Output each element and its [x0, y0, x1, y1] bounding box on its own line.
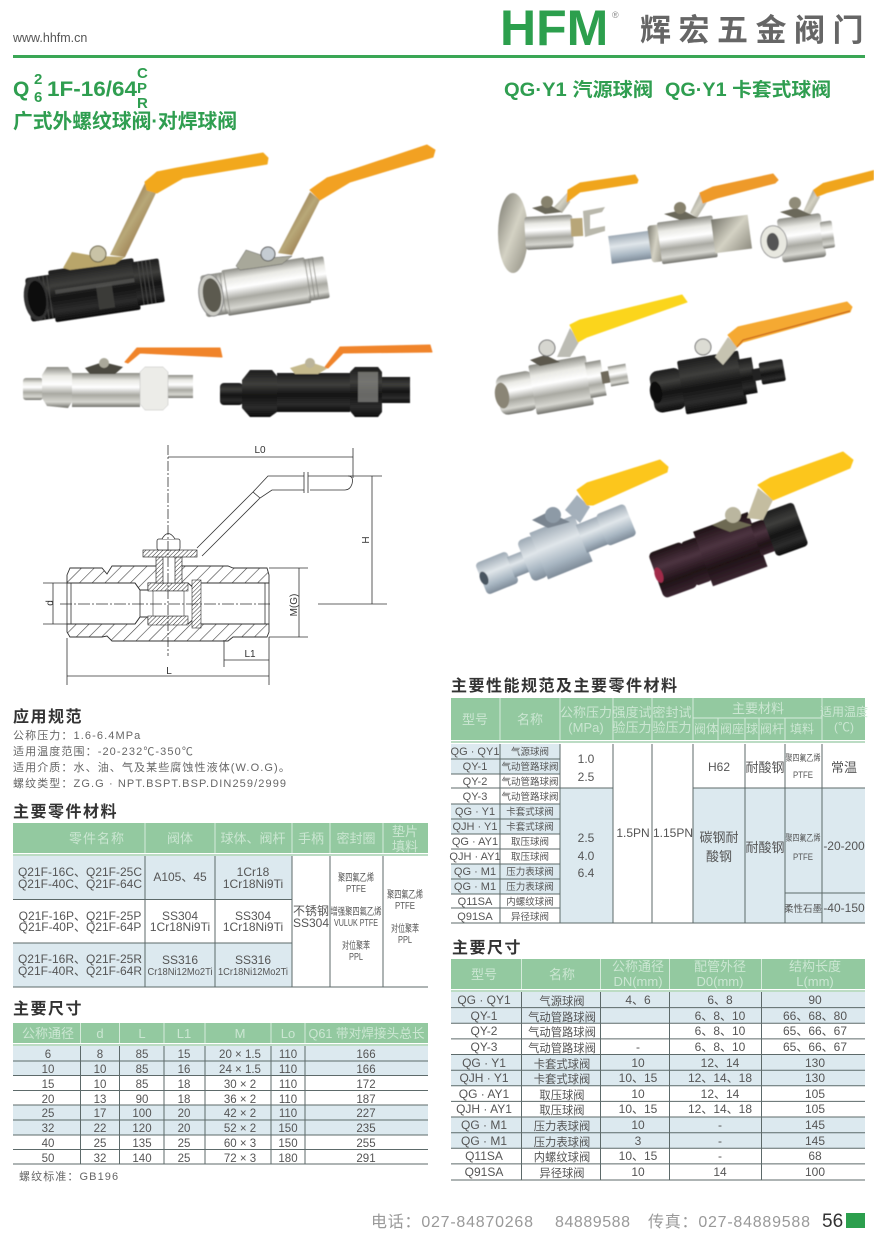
table header: 阀座 — [720, 721, 744, 736]
model and name rows: 气源球阀 — [511, 746, 549, 758]
table rows: 6、8 — [707, 993, 733, 1007]
title: left product model: 1F-16/64 — [47, 78, 137, 101]
table rows: 72 × 3 — [224, 1153, 256, 1165]
table rows: 25 — [94, 1138, 106, 1150]
table rows: 压力表球阀 — [534, 1135, 590, 1149]
center lines and dimensions — [43, 445, 387, 685]
table rows: 42 × 2 — [224, 1108, 256, 1120]
dimension labels: L — [166, 666, 172, 677]
table header — [462, 701, 868, 736]
table header: 公称通径 — [612, 959, 664, 974]
section heading: main parts materials: 主要零件材料 — [13, 802, 118, 821]
title: left product model: Q — [13, 78, 29, 101]
technical cross-section drawing — [43, 445, 387, 685]
brand logo — [500, 0, 871, 56]
merged spec cells: 2.5 — [578, 831, 595, 845]
table header: 球体、阀杆 — [220, 831, 286, 846]
table header: 名称 — [517, 712, 543, 727]
merged spec cells — [578, 752, 865, 915]
dimension labels: M(G) — [289, 594, 300, 616]
table rows: 15 — [42, 1079, 54, 1091]
table rows: 166 — [356, 1064, 376, 1076]
footer contact line: 84889588 — [555, 1214, 630, 1231]
table header — [22, 1026, 424, 1041]
table rows: 12、14、18 — [688, 1102, 752, 1116]
merged spec cells: 常温 — [831, 760, 857, 775]
table rows: 90 — [808, 993, 822, 1007]
table header: 型号 — [471, 967, 497, 982]
table rows: 气动管路球阀 — [528, 1025, 596, 1039]
table body: Cr18Ni12Mo2Ti — [148, 967, 212, 978]
table rows: Q91SA — [465, 1165, 503, 1179]
table body: SS316 — [235, 953, 271, 967]
dimension labels: L0 — [254, 445, 266, 456]
table rows: 100 — [805, 1165, 825, 1179]
merged spec cells: 2.5 — [578, 770, 595, 784]
section: application specs: 螺纹类型：ZG.G · NPT.BSPT.BSP.DIN259/2999 — [13, 776, 287, 790]
model and name rows: 气动管路球阀 — [501, 791, 559, 803]
table rows: 10 — [94, 1064, 106, 1076]
table rows: QY-1 — [471, 1009, 498, 1023]
table body: Q21F-40P、Q21F-64P — [19, 920, 141, 934]
title: left product model — [13, 65, 237, 133]
table body: Q21F-16R、Q21F-25R — [18, 952, 142, 966]
table body: SS304 — [293, 916, 329, 930]
table rows: 68 — [808, 1149, 822, 1163]
table rows: 172 — [356, 1079, 376, 1091]
table body: Q21F-40R、Q21F-64R — [18, 964, 142, 978]
table header: 阀体 — [694, 722, 718, 736]
table rows: 6 — [45, 1049, 51, 1061]
model and name rows: 内螺纹球阀 — [506, 896, 554, 908]
table rows: 50 — [42, 1153, 54, 1165]
model and name rows: 取压球阀 — [511, 836, 549, 848]
table body: Q21F-40C、Q21F-64C — [18, 877, 142, 891]
table rows: 3 — [635, 1134, 642, 1148]
table rows: 18 — [178, 1094, 190, 1106]
table rows: 12、14 — [701, 1056, 740, 1070]
table rows: 25 — [178, 1138, 190, 1150]
table rows: 20 × 1.5 — [219, 1049, 261, 1061]
table rows: 110 — [279, 1079, 297, 1091]
table header: 填料 — [790, 722, 814, 736]
table rows: - — [718, 1118, 722, 1132]
table rows: 20 — [178, 1108, 190, 1120]
table rows: QG · M1 — [461, 1118, 507, 1132]
model and name rows: QG · AY1 — [452, 836, 498, 848]
website url: www.hhfm.cn — [12, 31, 87, 45]
table rows: 10 — [42, 1064, 54, 1076]
merged spec cells: 聚四氟乙烯 — [786, 832, 820, 843]
model and name rows: 气动管路球阀 — [501, 761, 559, 773]
photo: hex-end ball valve — [607, 174, 778, 271]
table header: 密封试 — [652, 705, 692, 720]
table header: 公称通径 — [22, 1026, 74, 1041]
table body: SS304 — [235, 909, 271, 923]
model and name rows: QY-2 — [463, 776, 487, 788]
table rows: 卡套式球阀 — [534, 1072, 590, 1086]
table rows: - — [718, 1149, 722, 1163]
model and name rows: 取压球阀 — [511, 851, 549, 863]
title: left product model: P — [137, 80, 147, 97]
photo: dark compression valve — [645, 452, 853, 604]
table rows: 压力表球阀 — [534, 1119, 590, 1133]
table body: 1Cr18 — [237, 865, 270, 879]
table rows: 65、66、67 — [783, 1024, 847, 1038]
title: left product model: 2 — [34, 71, 42, 88]
table header: 验压力 — [612, 720, 652, 735]
table rows: QG · Y1 — [462, 1056, 506, 1070]
table header: 型号 — [462, 712, 488, 727]
table header: D0(mm) — [697, 974, 743, 989]
table rows: 8 — [97, 1049, 103, 1061]
table rows: 32 — [42, 1123, 54, 1135]
table header: L — [138, 1026, 146, 1041]
model and name rows: QG · QY1 — [451, 746, 499, 758]
merged spec cells: PTFE — [793, 770, 813, 780]
table rows: 187 — [356, 1094, 376, 1106]
table header: 公称压力 — [560, 705, 612, 720]
merged spec cells: 1.15PN — [653, 826, 693, 840]
table rows: 66、68、80 — [783, 1009, 847, 1023]
table header: Q61 带对焊接头总长 — [308, 1026, 424, 1041]
table rows: 10 — [631, 1118, 645, 1132]
table body: PPL — [349, 952, 363, 963]
model and name rows: QG · Y1 — [455, 806, 495, 818]
page number with green square — [822, 1211, 865, 1232]
model and name rows: 异径球阀 — [511, 911, 549, 923]
table rows: 227 — [356, 1108, 376, 1120]
table rows: 180 — [278, 1153, 298, 1165]
merged spec cells: H62 — [708, 760, 730, 774]
table rows: - — [636, 1040, 640, 1054]
model and name rows: QY-1 — [463, 761, 487, 773]
merged spec cells: 碳钢耐 — [699, 830, 739, 845]
table header: L1 — [177, 1026, 191, 1041]
table header: 阀体 — [167, 831, 193, 846]
table header: 阀杆 — [760, 722, 784, 736]
table body: 1Cr18Ni9Ti — [150, 920, 210, 934]
table header: 手柄 — [298, 831, 324, 846]
table rows: QY-3 — [471, 1040, 498, 1054]
title: right product names — [504, 79, 831, 101]
model and name rows: 压力表球阀 — [506, 866, 554, 878]
table rows: 145 — [805, 1134, 825, 1148]
photo: chrome threaded ball valve — [196, 145, 435, 320]
table rows: 异径球阀 — [539, 1166, 585, 1180]
table rows: 12、14 — [701, 1087, 740, 1101]
table body: SS304 — [162, 909, 198, 923]
table rows: 18 — [178, 1079, 190, 1091]
table rows: 120 — [132, 1123, 152, 1135]
table rows: 10 — [631, 1056, 645, 1070]
table rows: 110 — [279, 1108, 297, 1120]
title: right product names: QG·Y1 卡套式球阀 — [665, 79, 831, 101]
table rows: 10 — [94, 1079, 106, 1091]
table header: (℃) — [834, 720, 854, 734]
table rows: 150 — [278, 1138, 298, 1150]
merged spec cells: 1.0 — [578, 752, 595, 766]
table body: 聚四氟乙烯 — [387, 888, 423, 901]
table rows: QJH · Y1 — [459, 1071, 509, 1085]
section: application specs — [13, 707, 291, 790]
merged spec cells: PTFE — [793, 852, 813, 862]
table rows: 25 — [178, 1153, 190, 1165]
table rows: 140 — [132, 1153, 152, 1165]
table rows: QJH · AY1 — [456, 1102, 512, 1116]
table rows: 10 — [631, 1087, 645, 1101]
table body: A105、45 — [153, 870, 207, 884]
table rows: 取压球阀 — [539, 1103, 585, 1117]
table rows: QG · AY1 — [459, 1087, 510, 1101]
footer contact line: 传真：027-84889588 — [648, 1213, 810, 1231]
section: application specs: 应用规范 — [13, 707, 83, 726]
model and name rows: QG · M1 — [454, 881, 496, 893]
handle — [197, 472, 352, 556]
table rows: 10、15 — [619, 1071, 658, 1085]
table rows: 10 — [631, 1165, 645, 1179]
dimension labels: d — [45, 600, 56, 606]
table header: 验压力 — [652, 720, 692, 735]
table rows: 291 — [356, 1153, 376, 1165]
model and name rows: 卡套式球阀 — [506, 821, 554, 833]
dimension labels: L1 — [244, 649, 256, 660]
table rows: 52 × 2 — [224, 1123, 256, 1135]
table body: PTFE — [395, 901, 415, 912]
table rows: 90 — [136, 1094, 148, 1106]
model and name rows: QJH · AY1 — [449, 851, 501, 863]
table rows: 24 × 1.5 — [219, 1064, 261, 1076]
title: left product model: C — [137, 65, 148, 82]
table rows: 14 — [713, 1165, 727, 1179]
photo: small dark weld valve — [220, 345, 432, 417]
photo: black threaded ball valve — [20, 153, 268, 326]
merged spec cells: 4.0 — [578, 849, 595, 863]
title: right product names: QG·Y1 汽源球阀 — [504, 79, 653, 101]
table body: 聚四氟乙烯 — [338, 871, 374, 884]
table header: Lo — [281, 1026, 295, 1041]
valve body section — [67, 534, 269, 641]
footer contact line: 电话：027-84870268 — [371, 1213, 533, 1231]
table body: VULUK PTFE — [334, 918, 378, 929]
table header: DN(mm) — [613, 974, 663, 989]
photo: compact ball valve — [758, 170, 874, 265]
table rows: 32 — [94, 1153, 106, 1165]
table rows: 12、14、18 — [688, 1071, 752, 1085]
photo: silver compression valve — [471, 460, 668, 603]
table rows: 取压球阀 — [539, 1088, 585, 1102]
table rows: 110 — [279, 1064, 297, 1076]
section: application specs: 适用温度范围：-20-232℃-350℃ — [13, 744, 194, 758]
table header: d — [96, 1026, 104, 1041]
table: main dimensions right — [451, 959, 865, 1180]
photo: small chrome weld valve — [23, 348, 222, 410]
table header: 球 — [746, 722, 758, 736]
table rows: 卡套式球阀 — [534, 1057, 590, 1071]
table rows: 25 — [42, 1108, 54, 1120]
section heading: performance specs: 主要性能规范及主要零件材料 — [451, 676, 679, 695]
table rows: 105 — [805, 1102, 825, 1116]
table rows — [456, 993, 847, 1180]
table rows: 85 — [136, 1064, 148, 1076]
table rows: 15 — [178, 1049, 190, 1061]
title: left product model: R — [137, 95, 148, 112]
table header: 强度试 — [612, 705, 652, 720]
table rows: 100 — [132, 1108, 152, 1120]
merged spec cells: 耐酸钢 — [745, 840, 785, 855]
table body: Q21F-16P、Q21F-25P — [19, 909, 141, 923]
table rows: 10、15 — [619, 1102, 658, 1116]
table rows: 150 — [278, 1123, 298, 1135]
table rows: 130 — [805, 1056, 825, 1070]
merged spec cells: 1.5PN — [616, 826, 650, 840]
table header: 适用温度 — [820, 704, 868, 719]
table rows: 10、15 — [619, 1149, 658, 1163]
table rows: 4、6 — [625, 993, 651, 1007]
table: main parts materials — [13, 823, 428, 987]
table rows: 13 — [94, 1094, 106, 1106]
photo: flanged source ball valve — [498, 175, 638, 273]
title: left product model: 6 — [34, 89, 42, 106]
model and name rows: 气动管路球阀 — [501, 776, 559, 788]
title: left product model: 广式外螺纹球阀·对焊球阀 — [13, 109, 237, 133]
table rows: 气动管路球阀 — [528, 1010, 596, 1024]
table rows: 40 — [42, 1138, 54, 1150]
model and name rows: QY-3 — [463, 791, 487, 803]
merged spec cells: 柔性石墨 — [784, 903, 822, 915]
table rows: Q11SA — [465, 1149, 503, 1163]
footer contact line — [371, 1213, 810, 1231]
brand logo: 辉宏五金阀门 — [640, 13, 871, 48]
table rows: 16 — [178, 1064, 190, 1076]
table header: 主要材料 — [732, 701, 784, 716]
section: application specs: 公称压力：1.6-6.4MPa — [13, 728, 141, 742]
table rows: 105 — [805, 1087, 825, 1101]
table body: 1Cr18Ni12Mo2Ti — [218, 967, 288, 978]
table rows: 60 × 3 — [224, 1138, 256, 1150]
table rows: 235 — [356, 1123, 376, 1135]
photo: dark yellow-handle valve — [645, 302, 852, 420]
table rows: 166 — [356, 1049, 376, 1061]
table header: 密封圈 — [336, 831, 376, 846]
table rows: 6、8、10 — [695, 1040, 746, 1054]
model and name rows: 卡套式球阀 — [506, 806, 554, 818]
table rows: 30 × 2 — [224, 1079, 256, 1091]
table rows: 22 — [94, 1123, 106, 1135]
table header: 配管外径 — [694, 959, 746, 974]
table body — [18, 865, 423, 978]
merged spec cells: -40-150 — [823, 901, 865, 915]
table body: SS316 — [162, 953, 198, 967]
merged spec cells: 酸钢 — [706, 849, 732, 864]
table rows: 130 — [805, 1071, 825, 1085]
table rows: 20 — [178, 1123, 190, 1135]
table rows: - — [718, 1134, 722, 1148]
table rows: 36 × 2 — [224, 1094, 256, 1106]
table body: 对位聚苯 — [342, 939, 370, 952]
merged spec cells: 6.4 — [578, 866, 595, 880]
brand logo: ® — [612, 10, 619, 20]
table body: 增强聚四氟乙烯 — [330, 905, 382, 918]
merged spec cells: 耐酸钢 — [745, 760, 785, 775]
table header — [69, 824, 418, 854]
table body: 对位聚苯 — [391, 922, 419, 935]
table rows: 135 — [132, 1138, 152, 1150]
section: application specs: 适用介质：水、油、气及某些腐蚀性液体(W.O.G)。 — [13, 760, 291, 774]
model and name rows: Q11SA — [458, 896, 493, 908]
table rows: 110 — [279, 1094, 297, 1106]
model and name rows: 压力表球阀 — [506, 881, 554, 893]
table rows: 110 — [279, 1049, 297, 1061]
table rows: QG · M1 — [461, 1134, 507, 1148]
table body: 1Cr18Ni9Ti — [223, 877, 283, 891]
brand logo: HFM — [500, 0, 608, 56]
table header: 零件名称 — [69, 831, 125, 846]
dimension labels — [45, 445, 372, 677]
table rows: 气动管路球阀 — [528, 1041, 596, 1055]
table header — [471, 959, 841, 989]
table body: 1Cr18Ni9Ti — [223, 920, 283, 934]
note: thread standard: 螺纹标准：GB196 — [19, 1169, 119, 1183]
table rows: 内螺纹球阀 — [534, 1150, 590, 1164]
table rows: QY-2 — [471, 1024, 498, 1038]
table rows: 气源球阀 — [539, 994, 585, 1008]
merged spec cells: -20-200 — [823, 839, 865, 853]
model and name rows — [449, 746, 559, 923]
table header: M — [235, 1026, 245, 1041]
table rows: 6、8、10 — [695, 1024, 746, 1038]
table rows — [42, 1049, 376, 1165]
table header: 结构长度 — [789, 959, 841, 974]
section heading: main dimensions left: 主要尺寸 — [13, 999, 83, 1018]
table: main dimensions left — [13, 1023, 428, 1165]
page number with green square: 56 — [822, 1211, 843, 1232]
table header: 垫片 — [392, 824, 418, 839]
table rows: 255 — [356, 1138, 376, 1150]
table body: PPL — [398, 935, 412, 946]
table rows: 6、8、10 — [695, 1009, 746, 1023]
table body: Q21F-16C、Q21F-25C — [18, 865, 142, 879]
model and name rows: QG · M1 — [454, 866, 496, 878]
table rows: 85 — [136, 1049, 148, 1061]
table rows: 65、66、67 — [783, 1040, 847, 1054]
table: performance specs and materials — [449, 698, 868, 923]
merged spec cells: 聚四氟乙烯 — [786, 752, 820, 763]
table rows: 85 — [136, 1079, 148, 1091]
table header: 填料 — [392, 839, 418, 854]
table body: PTFE — [346, 884, 366, 895]
table header: (MPa) — [568, 720, 604, 735]
table header: L(mm) — [796, 974, 834, 989]
dimension labels: H — [361, 536, 372, 544]
table body: 不锈钢 — [293, 904, 329, 918]
table rows: 145 — [805, 1118, 825, 1132]
table header: 名称 — [549, 967, 575, 982]
table rows: 20 — [42, 1094, 54, 1106]
table rows: 17 — [94, 1108, 106, 1120]
table rows: QG · QY1 — [457, 993, 511, 1007]
section heading: main dimensions right: 主要尺寸 — [452, 938, 522, 957]
model and name rows: QJH · Y1 — [452, 821, 498, 833]
photo: chrome yellow-handle valve — [491, 295, 687, 421]
model and name rows: Q91SA — [457, 911, 493, 923]
